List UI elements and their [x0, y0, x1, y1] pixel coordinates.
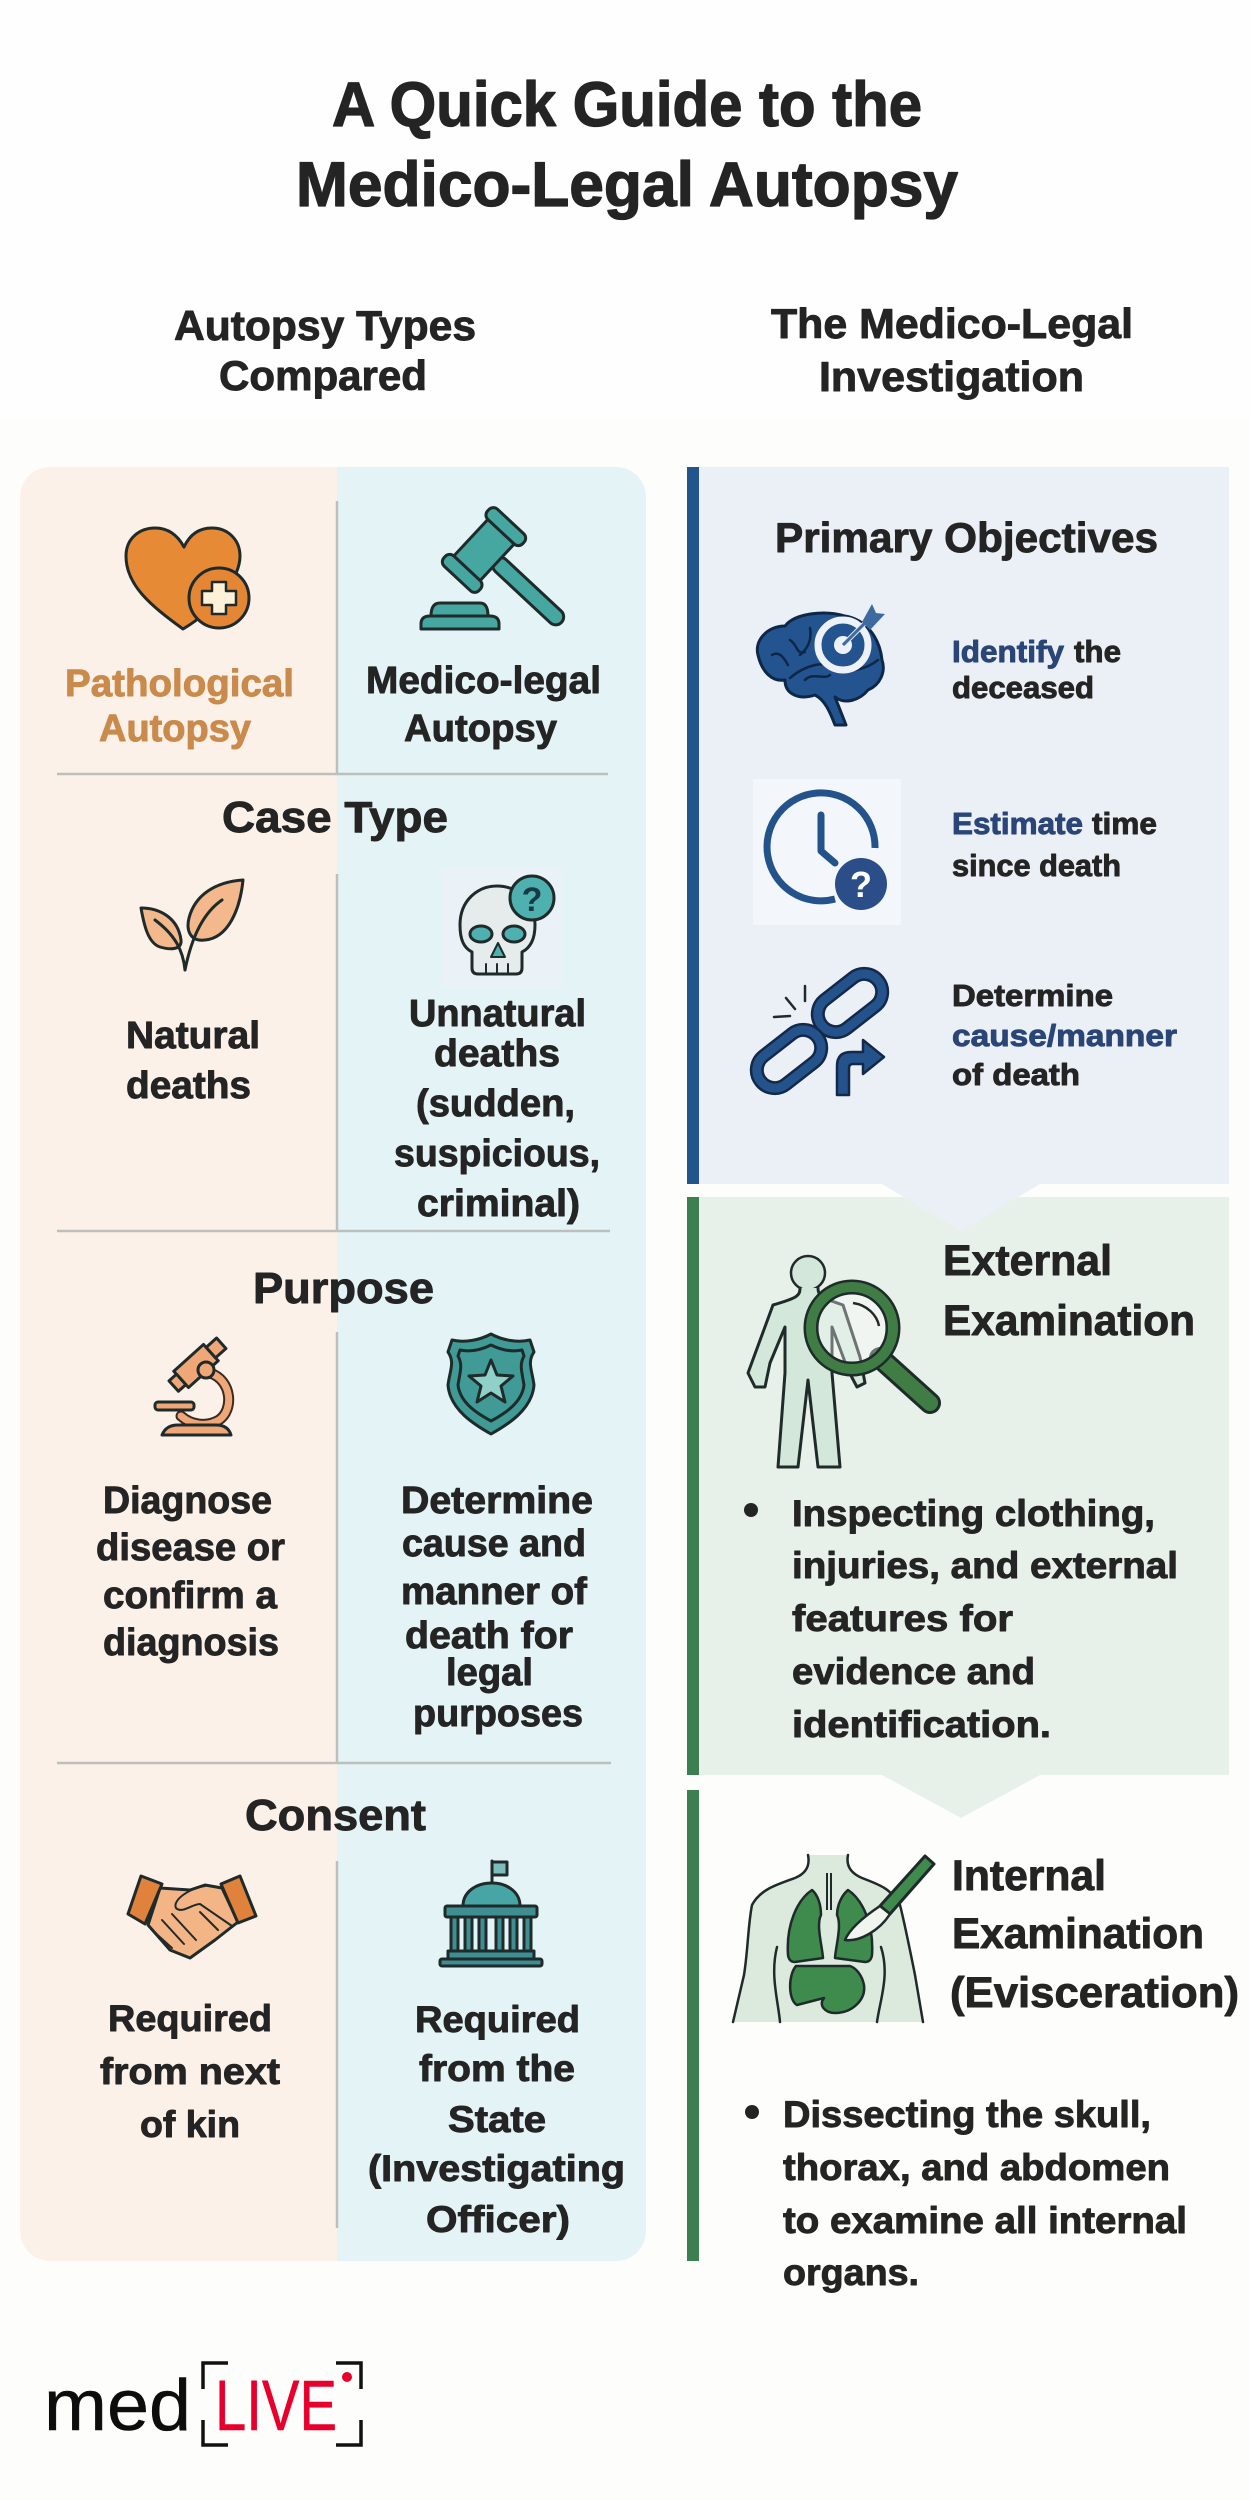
label: required from the state: from the — [419, 2048, 575, 2089]
icon: skull with question mark — [442, 868, 562, 988]
label: medico-legal autopsy — [366, 660, 601, 750]
text: estimate time since death — [952, 806, 1157, 883]
label: determine cause and manner — [401, 1480, 593, 1735]
panel: external examination — [687, 1197, 1229, 1818]
heading: primary objectives: Primary Objectives — [775, 514, 1158, 561]
label: required from the state: (Investigating — [368, 2148, 625, 2189]
label: unnatural deaths: Unnatural — [409, 993, 586, 1035]
title: Medico-Legal Autopsy — [296, 150, 958, 220]
icon: government building — [440, 1861, 542, 1966]
icon: handshake — [128, 1876, 256, 1958]
label: diagnose disease: diagnosis — [103, 1622, 279, 1664]
label: unnatural deaths: deaths — [434, 1033, 560, 1075]
heading: external examination — [943, 1237, 1195, 1345]
heading: internal examination: (Evisceration) — [950, 1969, 1239, 2017]
label: determine cause and manner: manner of — [401, 1571, 587, 1613]
bullet text: internal examination — [745, 2094, 1187, 2293]
icon: gavel — [421, 505, 588, 651]
panel: primary objectives — [687, 467, 1229, 1231]
text: estimate time since death: Estimate — [952, 806, 1083, 841]
label: medico-legal autopsy: Medico-legal — [366, 660, 601, 702]
bullet text: internal examination: organs. — [783, 2252, 919, 2293]
text: estimate time since death: since death — [952, 848, 1121, 883]
logo: medlive: LIVE — [215, 2367, 337, 2446]
icon: leaves — [141, 880, 243, 970]
bullet text: internal examination: to examine all internal — [783, 2200, 1187, 2241]
text: identify the deceased: Identify — [952, 634, 1065, 669]
label: required from the state: Required — [415, 1999, 580, 2040]
label: natural deaths: Natural — [126, 1015, 260, 1057]
icon: clock with question mark — [753, 779, 901, 925]
icon: police badge — [448, 1334, 534, 1434]
label: pathological autopsy: Autopsy — [99, 708, 251, 750]
icon: broken chain link with arrow — [750, 967, 889, 1095]
label: pathological autopsy — [65, 663, 294, 750]
label: unnatural deaths: suspicious, — [394, 1133, 600, 1175]
label: diagnose disease — [96, 1480, 285, 1664]
label: required from the state — [368, 1999, 625, 2240]
icon: heart with medical cross — [126, 528, 249, 629]
bullet text: internal examination: thorax, and abdomen — [783, 2147, 1170, 2188]
label: determine cause and manner: legal — [446, 1652, 533, 1694]
text: identify the deceased — [952, 634, 1121, 705]
bullet text: external examination — [744, 1493, 1178, 1745]
heading: internal examination — [950, 1852, 1239, 2017]
icon: torso with organs and scalpel — [733, 1855, 934, 2022]
text: determine cause and manner of death: of death — [952, 1057, 1080, 1092]
text: estimate time since death: time — [1092, 806, 1157, 841]
label: diagnose disease: confirm a — [103, 1575, 278, 1617]
heading: external examination: External — [943, 1237, 1112, 1285]
label: required from next of kin: from next — [100, 2051, 280, 2092]
heading: case type: Case Type — [222, 793, 448, 842]
panel: internal examination — [687, 1790, 1239, 2293]
heading: autopsy types compared: Compared — [219, 352, 427, 399]
title — [296, 70, 958, 220]
panel: autopsy comparison — [20, 467, 646, 2261]
title: A Quick Guide to the — [332, 70, 922, 140]
label: unnatural deaths: (sudden, — [416, 1083, 575, 1125]
bullet text: internal examination: Dissecting the skull, — [783, 2094, 1151, 2135]
bullet text: external examination: identification. — [792, 1704, 1051, 1745]
text: identify the deceased: deceased — [952, 670, 1094, 705]
label: natural deaths — [126, 1015, 260, 1107]
text: determine cause and manner of death — [952, 978, 1177, 1092]
label: pathological autopsy: Pathological — [65, 663, 294, 705]
label: determine cause and manner: death for — [405, 1615, 573, 1657]
logo: medlive — [44, 2363, 361, 2446]
heading: internal examination: Internal — [952, 1852, 1106, 1900]
heading: the medico-legal investigation: Investigation — [819, 353, 1084, 400]
label: unnatural deaths: criminal) — [417, 1183, 580, 1225]
icon: body with magnifier — [748, 1256, 930, 1467]
label: determine cause and manner: cause and — [402, 1523, 586, 1565]
heading: purpose: Purpose — [253, 1264, 434, 1313]
label: unnatural deaths — [394, 993, 600, 1225]
label: determine cause and manner: Determine — [401, 1480, 593, 1522]
text: identify the deceased: the — [1074, 634, 1121, 669]
icon: skull with question mark: ? — [522, 881, 542, 919]
heading: internal examination: Examination — [952, 1910, 1204, 1958]
text: determine cause and manner of death: cause/manner — [952, 1018, 1177, 1053]
label: required from next of kin — [100, 1998, 280, 2145]
label: determine cause and manner: purposes — [413, 1693, 583, 1735]
icon: microscope — [155, 1335, 231, 1435]
text: determine cause and manner of death: Determine — [952, 978, 1113, 1013]
heading: autopsy types compared: Autopsy Types — [174, 302, 476, 349]
icon: clock with question mark: ? — [850, 864, 872, 905]
heading: consent: Consent — [245, 1791, 426, 1840]
heading: autopsy types compared — [174, 302, 476, 399]
label: natural deaths: deaths — [126, 1065, 251, 1107]
label: medico-legal autopsy: Autopsy — [404, 708, 557, 750]
bullet text: external examination: injuries, and external — [792, 1545, 1178, 1586]
bullet text: external examination: features for — [792, 1598, 1013, 1639]
icon: brain with target — [757, 604, 885, 725]
label: required from next of kin: Required — [108, 1998, 272, 2039]
logo: medlive: med — [44, 2366, 191, 2446]
label: diagnose disease: disease or — [96, 1527, 285, 1569]
label: required from the state: State — [448, 2099, 546, 2140]
label: diagnose disease: Diagnose — [103, 1480, 272, 1522]
heading: the medico-legal investigation: The Medico-Legal — [771, 300, 1133, 347]
heading: the medico-legal investigation — [771, 300, 1133, 400]
label: required from the state: Officer) — [426, 2199, 570, 2240]
label: required from next of kin: of kin — [140, 2104, 240, 2145]
bullet text: external examination: evidence and — [792, 1651, 1035, 1692]
bullet text: external examination: Inspecting clothing, — [792, 1493, 1155, 1534]
heading: external examination: Examination — [943, 1297, 1195, 1345]
